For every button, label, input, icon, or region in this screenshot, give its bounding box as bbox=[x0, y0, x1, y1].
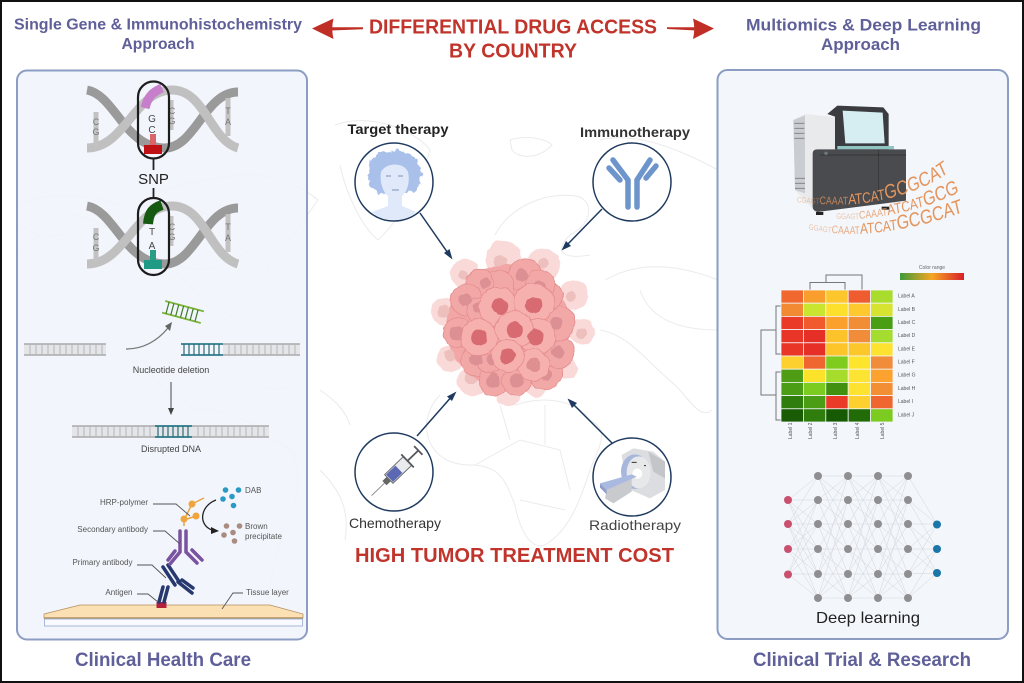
icon: SNP DNA helix top: C bbox=[148, 125, 156, 136]
heatmap row labels: Label D bbox=[898, 333, 916, 339]
icon: DNA sequencer bbox=[793, 106, 906, 215]
antigen bbox=[156, 602, 166, 608]
sequence letters: GGAGTCAAATATCATGCG bbox=[836, 181, 958, 220]
heatmap column labels: Label 2 bbox=[808, 422, 814, 439]
heatmap column labels: Label 4 bbox=[855, 422, 861, 439]
chemotherapy label: Chemotherapy bbox=[349, 515, 441, 531]
heatmap column labels: Label 1 bbox=[788, 422, 794, 439]
icon: target therapy patient bbox=[355, 143, 433, 221]
heading: left approach bbox=[14, 16, 302, 53]
icon: SNP DNA helix top: A bbox=[225, 117, 231, 127]
heatmap row labels: Label G bbox=[898, 372, 916, 378]
IHC labels: Tissue layer bbox=[246, 588, 289, 597]
heatmap cells bbox=[781, 290, 893, 422]
heatmap column labels: Label 5 bbox=[880, 422, 886, 439]
icon: SNP DNA helix bottom: C bbox=[169, 222, 176, 232]
arrow: chemotherapy to tumor bbox=[417, 392, 456, 436]
arrow: target therapy to tumor bbox=[420, 213, 452, 260]
icon: SNP DNA helix top: C bbox=[93, 117, 100, 127]
heading: Clinical Trial & Research: Clinical Trial & Research bbox=[753, 650, 971, 671]
icon: SNP DNA helix bottom: T bbox=[225, 222, 231, 232]
arrow: title left bbox=[312, 18, 363, 39]
heatmap row labels: Label C bbox=[898, 320, 916, 326]
heading: left approach: Single Gene & Immunohistochemistry bbox=[14, 16, 302, 34]
heatmap column labels: Label 3 bbox=[833, 422, 839, 439]
world map background bbox=[20, 121, 718, 615]
arrow: deletion bbox=[126, 322, 172, 349]
HRP polymer bbox=[180, 498, 204, 526]
icon: deleted green fragment bbox=[162, 301, 204, 323]
SNP label: SNP bbox=[138, 171, 169, 188]
icon: SNP DNA helix bottom: T bbox=[149, 227, 155, 238]
heading: right approach bbox=[746, 16, 981, 54]
heatmap legend: Color range bbox=[919, 265, 945, 271]
sequence letters: CGAGTCAAATATCATGCGCAT bbox=[797, 160, 946, 204]
icon: SNP DNA helix top: C bbox=[169, 106, 176, 116]
icon: SNP DNA helix top: T bbox=[225, 106, 231, 116]
title: DIFFERENTIAL DRUG ACCESS bbox=[369, 16, 657, 38]
heatmap row labels bbox=[898, 294, 916, 418]
IHC labels: precipitate bbox=[245, 532, 282, 541]
heading: Clinical Health Care: Clinical Health Care bbox=[75, 650, 251, 671]
icon: SNP DNA helix top bbox=[87, 82, 238, 158]
icon: CT scanner bbox=[593, 438, 671, 516]
icon: antibody bbox=[593, 143, 671, 221]
arrow: reaction bbox=[203, 500, 219, 534]
DAB dots bbox=[220, 487, 241, 508]
icon: SNP DNA helix bottom: A bbox=[149, 241, 156, 252]
deep learning label: Deep learning bbox=[816, 610, 920, 627]
IHC labels: Primary antibody bbox=[72, 558, 132, 567]
dendrograms bbox=[761, 275, 862, 420]
panel: right Clinical Trial & Research bbox=[716, 69, 1009, 640]
target therapy label: Target therapy bbox=[348, 121, 449, 137]
icon: SNP DNA helix bottom: G bbox=[168, 232, 176, 242]
icon: SNP DNA helix bottom: G bbox=[92, 243, 100, 253]
title bbox=[369, 16, 657, 62]
SNP label bbox=[138, 158, 169, 198]
arrow: title right bbox=[667, 18, 714, 39]
IHC labels: Brown bbox=[245, 522, 268, 531]
heatmap legend bbox=[900, 265, 964, 280]
panel: left Clinical Health Care bbox=[17, 70, 307, 640]
IHC labels: Secondary antibody bbox=[77, 525, 148, 534]
icon: SNP DNA helix bottom bbox=[87, 198, 238, 275]
heatmap row labels: Label H bbox=[898, 386, 916, 392]
icon: SNP DNA helix bottom: A bbox=[225, 233, 231, 243]
icon: SNP DNA helix bottom: C bbox=[93, 232, 100, 242]
heatmap row labels: Label F bbox=[898, 360, 915, 366]
heading: right approach: Multiomics & Deep Learning bbox=[746, 16, 981, 34]
heading: left approach: Approach bbox=[122, 36, 194, 53]
heading: right approach: Approach bbox=[821, 35, 900, 54]
nucleotide deletion diagram: Disrupted DNA bbox=[141, 444, 201, 454]
heatmap row labels: Label E bbox=[898, 346, 916, 352]
heading: high tumor treatment cost: HIGH TUMOR TREATMENT COST bbox=[355, 544, 674, 567]
IHC labels: HRP-polymer bbox=[100, 498, 148, 507]
chart: heatmap bbox=[761, 265, 964, 439]
heatmap row labels: Label I bbox=[898, 399, 913, 405]
tumor cell cluster bbox=[431, 240, 595, 406]
IHC labels: DAB bbox=[245, 486, 261, 495]
tissue layer bbox=[44, 605, 303, 626]
heatmap row labels: Label A bbox=[898, 294, 915, 300]
icon: SNP DNA helix top: G bbox=[148, 114, 156, 125]
icon: syringe bbox=[355, 433, 433, 511]
nucleotide deletion diagram: Nucleotide deletion bbox=[133, 365, 209, 375]
secondary antibody bbox=[168, 531, 202, 564]
immunotherapy label: Immunotherapy bbox=[580, 124, 690, 140]
arrow: immunotherapy to tumor bbox=[562, 209, 602, 250]
sequence letters: GGAGTCAAATATCATGCGCAT bbox=[809, 199, 960, 234]
primary antibody bbox=[159, 565, 193, 602]
heatmap column labels bbox=[788, 422, 886, 439]
icon: SNP DNA helix top: G bbox=[168, 116, 176, 126]
arrow: radiotherapy to tumor bbox=[568, 398, 613, 444]
icon: SNP DNA helix top: G bbox=[92, 127, 100, 137]
nucleotide deletion diagram bbox=[24, 301, 300, 454]
sequence letters bbox=[797, 160, 960, 234]
radiotherapy label: Radiotherapy bbox=[589, 517, 681, 533]
heatmap row labels: Label B bbox=[898, 307, 916, 313]
neural network diagram bbox=[784, 472, 941, 602]
brown precipitate dots bbox=[221, 523, 242, 544]
title: BY COUNTRY bbox=[449, 40, 577, 62]
heatmap row labels: Label J bbox=[898, 412, 915, 418]
immunohistochemistry diagram bbox=[44, 486, 303, 626]
IHC labels bbox=[72, 486, 289, 597]
IHC labels: Antigen bbox=[105, 588, 132, 597]
